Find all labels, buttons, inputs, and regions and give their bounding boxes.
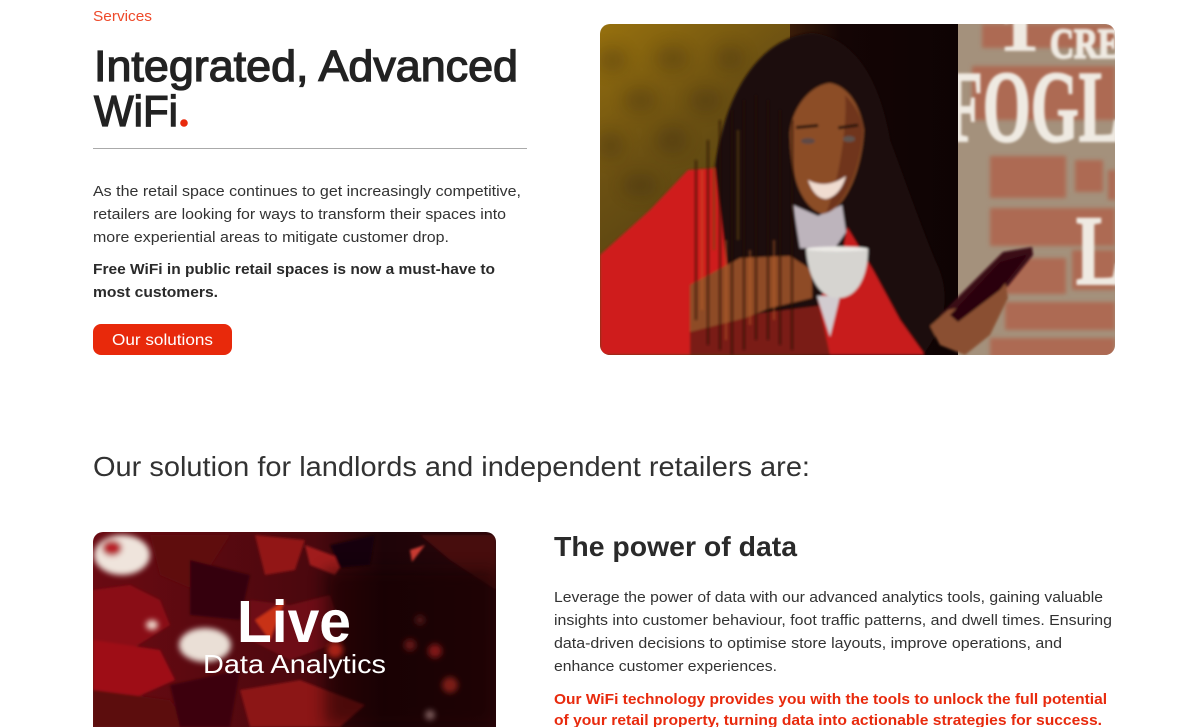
description text block: insights into customer behaviour, foot traffic patterns, and dwell times. Ensuring: [554, 612, 1112, 629]
card title: Data Analytics: [203, 649, 386, 679]
card title: [205, 599, 385, 678]
wall lettering: CRE: [1050, 22, 1120, 68]
wall lettering: [958, 24, 1115, 287]
bold statement: Free WiFi in public retail spaces is now a must-have to: [93, 261, 495, 278]
bold statement: most customers.: [93, 284, 218, 301]
description text block: Leverage the power of data with our advanced analytics tools, gaining valuable: [554, 589, 1103, 606]
wall lettering: L: [1076, 195, 1122, 306]
red highlighted statement: Our WiFi technology provides you with the tools to unlock the full potential: [554, 691, 1107, 708]
intro text block: [93, 183, 521, 246]
card title: Live: [237, 589, 351, 655]
button: Our solutions: Our solutions: [112, 332, 213, 349]
heading: Integrated, Advanced WiFi: [94, 42, 518, 136]
red highlighted statement: [554, 691, 1107, 727]
description text block: [554, 589, 1112, 675]
heading: Integrated, Advanced WiFi: WiFi: [94, 87, 178, 136]
photo: woman with coffee and phone: [596, 2, 1122, 358]
fluted glass streaks: [696, 95, 792, 355]
section heading: Our solution for landlords and independent retailers are:: [93, 451, 810, 482]
description text block: enhance customer experiences.: [554, 658, 777, 675]
red leaves: [93, 535, 496, 727]
description text block: data-driven decisions to optimise store layouts, improve operations, and: [554, 635, 1062, 652]
woman: [600, 33, 1033, 355]
wall lettering: 1: [1000, 2, 1038, 62]
card: Live Data Analytics: [93, 532, 496, 727]
intro text block: retailers are looking for ways to transform their spaces into: [93, 206, 506, 223]
tufted sofa shading: [596, 46, 744, 197]
eyebrow: Services: Services: [93, 8, 152, 25]
intro text block: As the retail space continues to get increasingly competitive,: [93, 183, 521, 200]
subheading: The power of data: The power of data: [554, 531, 797, 562]
intro text block: more experiential areas to mitigate customer drop.: [93, 229, 449, 246]
button: Our solutions: [93, 324, 232, 355]
brick wall: [958, 24, 1115, 355]
bold statement: [93, 261, 495, 301]
heading: Integrated, Advanced WiFi: Integrated, Advanced: [94, 42, 518, 91]
